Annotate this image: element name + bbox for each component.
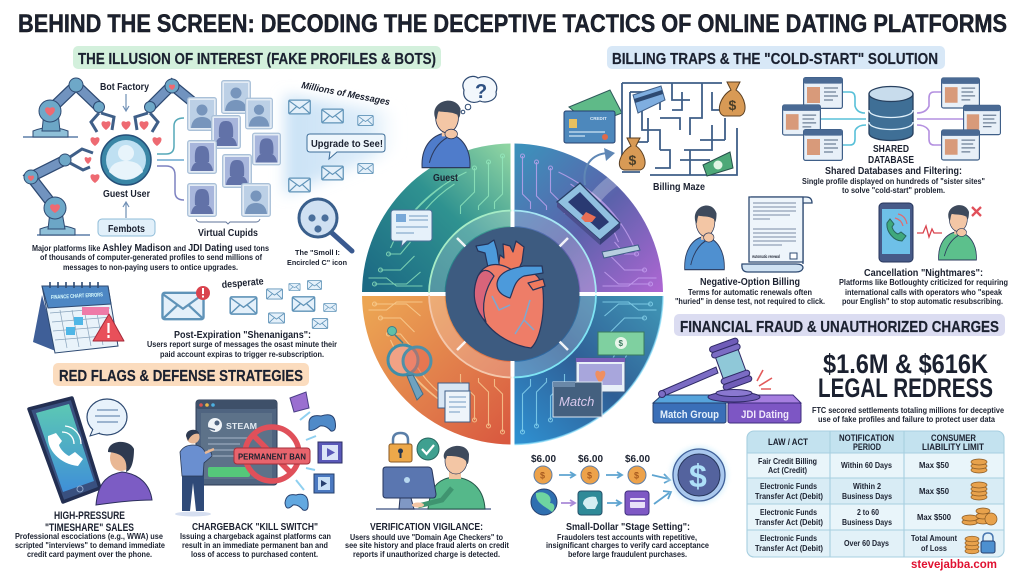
row: fair credit billing act: Fair Credit Billing [758, 456, 817, 466]
text: negative-option billing: "huried" in dense test, not required to click. [675, 297, 825, 306]
row: electronic funds transfer act over 60 days: Electronic Funds [760, 533, 817, 543]
row: electronic funds transfer act 2 to 60 days: Transfer Act (Debit) [755, 517, 823, 527]
text: negative-option billing: Negative-Option Billing [700, 276, 800, 288]
row: electronic funds transfer act 2 to 60 days: 2 to 60 [857, 507, 879, 517]
icon: robot arm top middle [135, 79, 200, 132]
row: electronic funds transfer act within 2 days: Transfer Act (Debit) [755, 491, 823, 501]
wheel: quadrants [362, 144, 663, 444]
text: negative-option billing: Terms for automatic renewals often [688, 288, 812, 297]
text: timeshare sales: HIGH-PRESSURE [54, 510, 125, 522]
icon: match windows: Match [559, 394, 594, 409]
text: negative-option billing [675, 276, 825, 306]
row: electronic funds transfer act 2 to 60 days: Business Days [842, 517, 892, 527]
table header: LIABILITY LIMIT [922, 442, 984, 452]
icon: cash: $ [618, 339, 624, 348]
text: small-dollar stage setting [546, 521, 709, 559]
icon: magnifier and ring [388, 326, 431, 400]
arrows: coin sequence [559, 472, 671, 506]
icon: card tile [625, 491, 649, 515]
icon: gavel impact [757, 370, 772, 389]
label: small i icon: The "Smoll I: [295, 248, 340, 257]
arrow: bot factory to guest [123, 94, 129, 111]
icon: credit cards [564, 90, 622, 143]
badge: fembots [98, 219, 155, 236]
row: electronic funds transfer act over 60 days: Transfer Act (Debit) [755, 543, 823, 553]
icon: coins: $ [587, 470, 592, 480]
text: cancellation nightmares: pour English" to stop automatic resubscribing. [842, 297, 1003, 306]
text: verification vigilance: reports if unauthorized charge is detected. [353, 550, 500, 559]
text: ftc settlements: FTC secored settlements totaling millions for deceptive [812, 406, 1004, 415]
windows: sister sites left [783, 78, 842, 160]
icon: database cylinder [869, 86, 913, 140]
icon: steam window: STEAM [226, 422, 257, 431]
grid: virtual cupid profile cards [188, 81, 280, 216]
icon: billing maze [622, 83, 737, 175]
icon: phone with call [29, 398, 152, 505]
text: cancellation nightmares: international calls with operators who "speak [845, 288, 1002, 297]
table header: CONSUMER [931, 433, 976, 443]
connectors [821, 92, 963, 145]
text: post-expiration shenanigans [147, 329, 337, 359]
badge: permanent ban: PERMANENT BAN [238, 452, 306, 462]
icon: person at computer [376, 446, 491, 509]
heading: billing traps [607, 46, 945, 69]
row: electronic funds transfer act within 2 days: Max $50 [919, 486, 949, 496]
panel: financial fraud and unauthorized charges [653, 314, 1005, 571]
icon: piggy bank tile [578, 491, 602, 515]
text: small-dollar stage setting: Fraudolers test accounts with repetitive, [557, 533, 697, 542]
icon: maze card [633, 86, 665, 113]
row: electronic funds transfer act 2 to 60 days: Max $500 [917, 512, 951, 522]
watermark: stevejabba.com [911, 557, 997, 571]
icon: robot arm top left [23, 78, 114, 137]
text: small-dollar stage setting: insignificant charges to verify card acceptance [546, 541, 709, 550]
chart: central heart wheel [362, 144, 663, 444]
text: chargeback kill switch: Issuing a chargeback against platforms can [180, 532, 331, 541]
text: post-expiration shenanigans: Post-Expiration "Shenanigans": [174, 329, 311, 341]
icon: message glow [285, 95, 395, 195]
text: chargeback kill switch: CHARGEBACK "KILL SWITCH" [192, 521, 318, 533]
icon: money bag right [719, 82, 745, 116]
icon: anatomical heart [474, 240, 545, 348]
text: cancellation nightmares [839, 267, 1008, 306]
icon: expiring envelopes [162, 280, 336, 328]
text: small-dollar stage setting: Small-Dollar "Stage Setting": [566, 521, 690, 533]
text: chargeback kill switch: result in an immediate permanent ban and [182, 541, 328, 550]
icon: envelopes [289, 100, 373, 192]
label: shared database: DATABASE [868, 154, 914, 166]
row: electronic funds transfer act within 2 days: Electronic Funds [760, 481, 817, 491]
row: fair credit billing act: Within 60 Days [841, 460, 892, 470]
icon: phone with pulse [879, 203, 942, 262]
text: post-expiration shenanigans: paid account expiras to trigger re-subscription. [160, 350, 324, 359]
icon: money bag left [619, 138, 645, 170]
callout: upgrade to see: Upgrade to See! [311, 139, 383, 150]
text: ftc settlements [812, 406, 1004, 424]
row: electronic funds transfer act within 2 days: Within 2 [853, 481, 881, 491]
icon: money bag left: $ [628, 152, 636, 168]
text: shared databases and filtering: Single profile displayed on hundreds of "sister sites" [802, 177, 985, 186]
pattern: circuit traces [368, 154, 656, 434]
text: major platforms: of thousands of computer-generated profiles to send millions of [40, 253, 262, 262]
text: major platforms: messages to non-paying users to ontice upgrades. [63, 263, 238, 272]
panel: the illusion of interest [23, 46, 441, 359]
table: liability limits [747, 431, 1004, 557]
icon: guest thinking person [422, 76, 497, 168]
icon: thinking person blue [685, 206, 724, 270]
labels: six dollar charges: $6.00 [531, 454, 556, 465]
row: electronic funds transfer act over 60 days: Total Amount [911, 533, 957, 543]
panel: small-dollar stage setting [531, 441, 733, 559]
block: jdi dating: JDI Dating [741, 409, 789, 421]
icon: frustrated person green [939, 205, 981, 260]
icon: coins: $ [540, 470, 545, 480]
badge: permanent ban [234, 427, 310, 481]
text: shared databases and filtering: Shared Databases and Filtering: [825, 165, 962, 177]
text: timeshare sales: credit card payment over the phone. [27, 550, 152, 559]
icon: documents [438, 383, 470, 422]
row: electronic funds transfer act over 60 days: of Loss [921, 543, 947, 553]
row: electronic funds transfer act 2 to 60 days [755, 507, 997, 527]
ring: glowing hub [421, 203, 604, 385]
icon: gavel [658, 337, 753, 398]
arrows: guest to cupids [157, 118, 184, 200]
icon: thought bubble: ? [475, 81, 487, 103]
text: timeshare sales: scripted "interviews" to demand immediate [15, 541, 165, 550]
labels: six dollar charges [531, 454, 650, 465]
icon: calendar with warning: FINANCE CHART ERRORS [51, 292, 103, 301]
heading: illusion of interest [73, 46, 441, 69]
text: chargeback kill switch: loss of access to purchased content. [191, 550, 318, 559]
text: timeshare sales: "TIMESHARE" SALES [45, 522, 134, 534]
icon: guest user avatar [101, 135, 151, 185]
row: electronic funds transfer act 2 to 60 days: Electronic Funds [760, 507, 817, 517]
icon: credit cards: CREDIT [590, 116, 607, 121]
text: timeshare sales: Professional escociations (e.g., WWA) use [15, 532, 163, 541]
text: shared databases and filtering [802, 165, 985, 195]
block: jdi dating [728, 395, 801, 423]
panel: red flags and defense strategies [15, 363, 509, 559]
icon: calendar with warning [33, 282, 124, 353]
arrow: fembots to guest [123, 202, 129, 218]
block: match group: Match Group [660, 409, 719, 421]
icon: billing slot [557, 148, 645, 258]
heading: illusion of interest: THE ILLUSION OF INTEREST (FAKE PROFILES & BOTS) [78, 51, 436, 68]
text: timeshare sales [15, 510, 165, 559]
diagram: shared database [783, 78, 1000, 166]
stat: legal redress: $1.6M & $616K [823, 349, 988, 379]
text: major platforms [32, 243, 269, 272]
label: virtual cupids: Virtual Cupids [198, 228, 258, 239]
icon: coins [534, 466, 646, 484]
label: small i icon: Encircled C" icon [287, 258, 347, 267]
table header: NOTIFICATION [839, 433, 894, 443]
row: electronic funds transfer act within 2 days [755, 481, 987, 501]
table header [768, 433, 984, 452]
label: virtual cupids [196, 219, 260, 239]
icon: chat card [391, 210, 432, 247]
heading: red flags [53, 363, 309, 386]
icon: large dollar coin: $ [689, 458, 707, 494]
panel: billing traps and cold-start [564, 46, 1008, 306]
row: fair credit billing act: Max $50 [919, 460, 949, 470]
badge: fembots: Fembots [108, 224, 145, 235]
heading: billing traps: BILLING TRAPS & THE "COLD-START" SOLUTION [612, 51, 938, 68]
icon: terms scroll: Automatic renewal [752, 254, 780, 259]
icon: magnifying glass [299, 199, 352, 251]
text: cancellation nightmares: Cancellation "Nightmares": [864, 267, 983, 279]
row: electronic funds transfer act over 60 days [755, 533, 995, 554]
windows: sister sites right [942, 78, 1000, 160]
icon: steam window [196, 400, 277, 485]
icon: maze cash [703, 152, 733, 176]
block: match group [653, 395, 728, 423]
text: verification vigilance: see site history and place fraud alerts on credit [345, 541, 509, 550]
text: cancellation nightmares: Platforms like Botloughty criticized for requiring [839, 278, 1008, 287]
icon: coins: $ [634, 470, 639, 480]
row: fair credit billing act: Act (Credit) [768, 465, 807, 475]
labels: six dollar charges: $6.00 [578, 454, 603, 465]
icon: lost content [285, 392, 342, 510]
stat: legal redress [818, 349, 993, 403]
label: bot factory: Bot Factory [100, 82, 149, 93]
icon: verification lock and check [389, 433, 439, 462]
text: shared databases and filtering: to solve "cold-start" problem. [842, 186, 945, 195]
icon: terms scroll [742, 197, 812, 272]
table header: PERIOD [853, 442, 881, 452]
row: electronic funds transfer act within 2 days: Business Days [842, 491, 892, 501]
text: ftc settlements: use of fake profiles and failure to protect user data [818, 415, 995, 424]
label: small i icon [287, 248, 347, 267]
text: verification vigilance: VERIFICATION VIGILANCE: [370, 521, 483, 533]
label: millions of messages: Millions of Messages [300, 80, 391, 108]
icon: money bag right: $ [728, 97, 736, 113]
icon: cash [598, 332, 644, 355]
labels: six dollar charges: $6.00 [625, 454, 650, 465]
text: post-expiration shenanigans: Users report surge of messages the osast minute their [147, 340, 337, 349]
icon: floating hearts [85, 121, 162, 183]
icon: globe [531, 489, 557, 515]
icon: sound block [708, 390, 760, 402]
label: billing maze: Billing Maze [653, 182, 705, 193]
label: shared database: SHARED [873, 143, 909, 155]
text: verification vigilance [345, 521, 509, 559]
label: shared database [868, 143, 914, 166]
heading: red flags: RED FLAGS & DEFENSE STRATEGIES [59, 368, 303, 385]
label: guest: Guest [433, 173, 459, 184]
callout: upgrade to see [307, 134, 385, 159]
text: chargeback kill switch [180, 521, 331, 559]
label: desperate: desperate [221, 276, 264, 291]
icon: match windows [553, 358, 625, 417]
text: verification vigilance: Users should uve "Domain Age Checkers" to [350, 533, 503, 542]
icon: robot arm lower left [24, 149, 93, 235]
table header: LAW / ACT [768, 437, 808, 447]
text: major platforms: Major platforms like Ashley Madison and JDI Dating used tons [32, 243, 269, 254]
icon: large dollar coin [665, 441, 733, 509]
icon: person at steam window [175, 430, 214, 516]
text: small-dollar stage setting: before large fraudulent purchases. [568, 550, 687, 559]
row: fair credit billing act [758, 456, 987, 475]
label: guest user: Guest User [103, 189, 150, 200]
row: electronic funds transfer act over 60 days: Over 60 Days [844, 538, 889, 548]
